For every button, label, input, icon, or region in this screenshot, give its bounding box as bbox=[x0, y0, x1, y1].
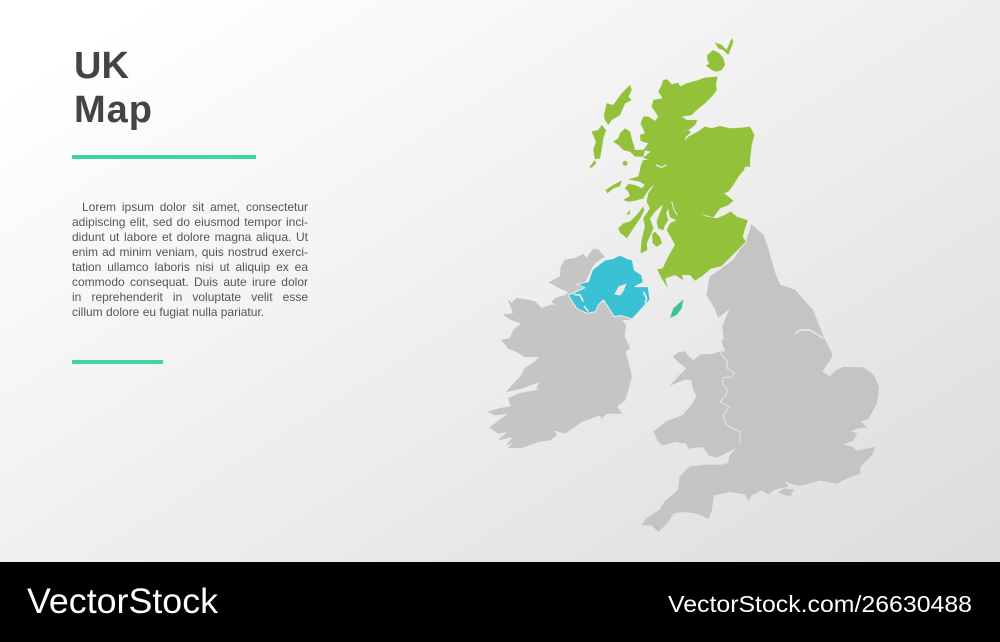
title: Map bbox=[74, 89, 153, 131]
region: Scotland bbox=[589, 38, 754, 288]
text block: body copy: didunt ut labore et dolore magna aliqua. Ut bbox=[72, 230, 308, 244]
text block: body copy: in reprehenderit in voluptate velit esse bbox=[72, 290, 308, 304]
region: Northern Ireland bbox=[568, 255, 650, 319]
region: Ireland bbox=[488, 249, 632, 448]
text block: body copy: enim ad minim veniam, quis nostrud exerci- bbox=[72, 245, 308, 259]
text block: body copy: Lorem ipsum dolor sit amet, consectetur bbox=[82, 200, 308, 214]
text block: body copy bbox=[72, 200, 308, 319]
image url: VectorStock.com/26630488 bbox=[668, 591, 972, 617]
title: UK bbox=[74, 45, 129, 87]
southern Scotland and islands bbox=[606, 160, 748, 288]
title bbox=[74, 45, 153, 131]
border: England and Wales bbox=[720, 353, 740, 443]
text block: body copy: tation ullamco laboris nisi ut aliquip ex ea bbox=[72, 260, 308, 274]
region: Isle of Man bbox=[670, 299, 683, 318]
accent bar: top bbox=[72, 155, 256, 159]
region: southern England and Wales bbox=[642, 340, 879, 532]
region: Isle of Wight bbox=[778, 488, 794, 496]
northern Scotland and islands bbox=[589, 38, 754, 168]
estuary: Humber bbox=[795, 330, 823, 338]
logo: VectorStock: VectorStock bbox=[27, 582, 219, 621]
text block: body copy: cillum dolore eu fugiat nulla pariatur. bbox=[72, 305, 264, 319]
lochs and border: Scotland bbox=[656, 165, 748, 269]
accent bar: bottom bbox=[72, 360, 163, 364]
text block: body copy: adipiscing elit, sed do eiusmod tempor inci- bbox=[72, 215, 308, 229]
region: northern England bbox=[707, 225, 832, 373]
text block: body copy: commodo consequat. Duis aute irure dolor bbox=[72, 275, 308, 289]
footer bar bbox=[27, 582, 972, 621]
